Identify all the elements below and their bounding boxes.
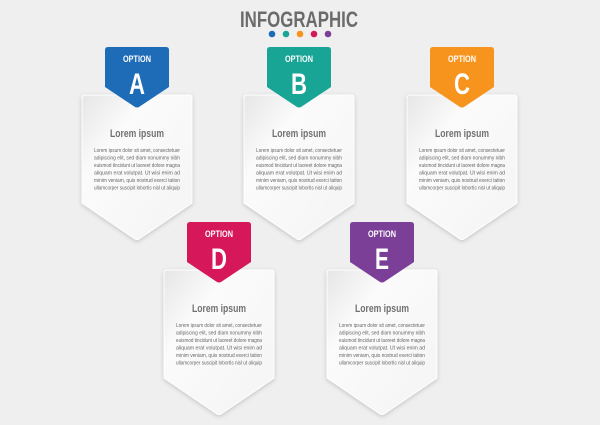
panel: option A — [82, 47, 192, 240]
tag B: OPTION — [285, 54, 313, 64]
tag C: OPTION — [448, 54, 476, 64]
tag E: OPTION — [368, 229, 396, 239]
tag A: A — [129, 68, 145, 101]
tag D: D — [211, 243, 227, 276]
tag D: OPTION — [205, 229, 233, 239]
tag C: C — [454, 68, 470, 101]
panel: option C — [407, 47, 517, 240]
panel: option E — [327, 222, 437, 414]
tag C — [430, 47, 494, 108]
title — [240, 7, 358, 37]
tag E: E — [375, 243, 389, 276]
tag A — [105, 47, 169, 108]
panel: option B — [244, 47, 354, 240]
title: INFOGRAPHIC — [240, 7, 358, 32]
tag D — [187, 222, 251, 282]
tag E — [350, 222, 414, 282]
panel: option D — [164, 222, 274, 414]
tag B: B — [291, 68, 307, 101]
tag A: OPTION — [123, 54, 151, 64]
tag B — [267, 47, 331, 108]
